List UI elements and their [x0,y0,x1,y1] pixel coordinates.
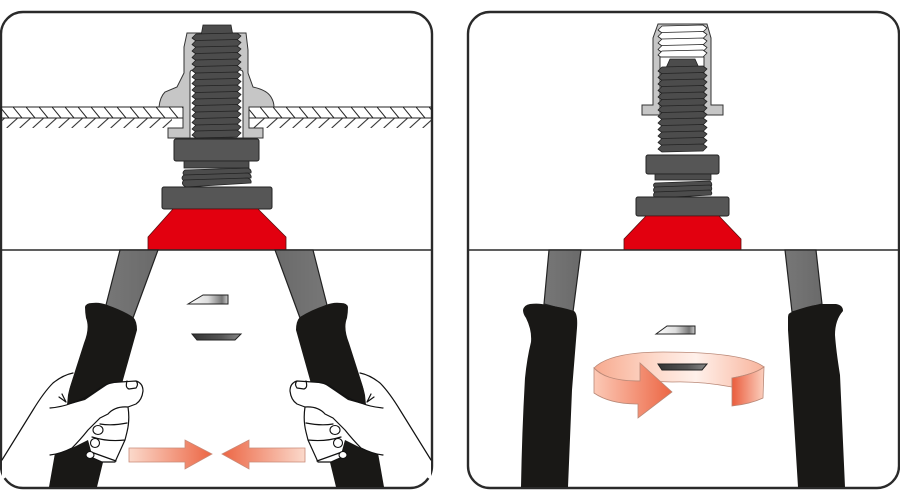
workpiece plate, right part [249,107,432,128]
left arm [544,250,581,312]
band right end [732,367,764,406]
rivet nut body [159,33,274,138]
right handle with hand (mirrored) [275,250,431,487]
right panel: rotate to release [468,12,899,488]
washer [636,197,729,216]
left handle with hand [2,250,158,487]
nut cavity [660,57,704,115]
rotation arrow [594,352,764,418]
threaded bolt [192,33,241,138]
finger nails [86,426,103,458]
workpiece plate, left part [1,107,183,128]
spring coil [654,181,712,198]
nut cavity [190,70,243,138]
arrow pointing right [129,440,212,469]
hand outline [2,373,143,480]
upper nut [174,139,259,161]
adjustment mark upper [656,326,695,334]
neck [655,174,711,180]
left panel frame [1,12,432,488]
divider line [1,249,432,251]
red tool head [148,209,286,250]
right grip [788,304,845,487]
black grip [49,303,137,487]
arrow body and head [594,363,672,418]
hand contour lines [2,373,143,462]
divider line [468,249,899,251]
bolt head [201,25,233,36]
left grip [521,304,577,487]
bolt tip [666,59,699,68]
rivet nut body [642,24,723,115]
upper nut [646,155,719,174]
right panel frame [468,12,899,488]
right arm [785,250,822,312]
threaded bolt [658,66,707,152]
band back [594,352,764,387]
adjustment mark lower [658,364,707,370]
internal thread, white [658,25,707,58]
neck [184,161,249,168]
steel arm [106,250,158,318]
adjustment mark upper [188,295,228,304]
washer [162,187,272,209]
spring coil [182,168,251,187]
red tool head [624,216,741,250]
arrow pointing left [222,440,305,469]
left panel: squeeze handles [1,12,432,488]
adjustment mark lower [192,334,241,340]
